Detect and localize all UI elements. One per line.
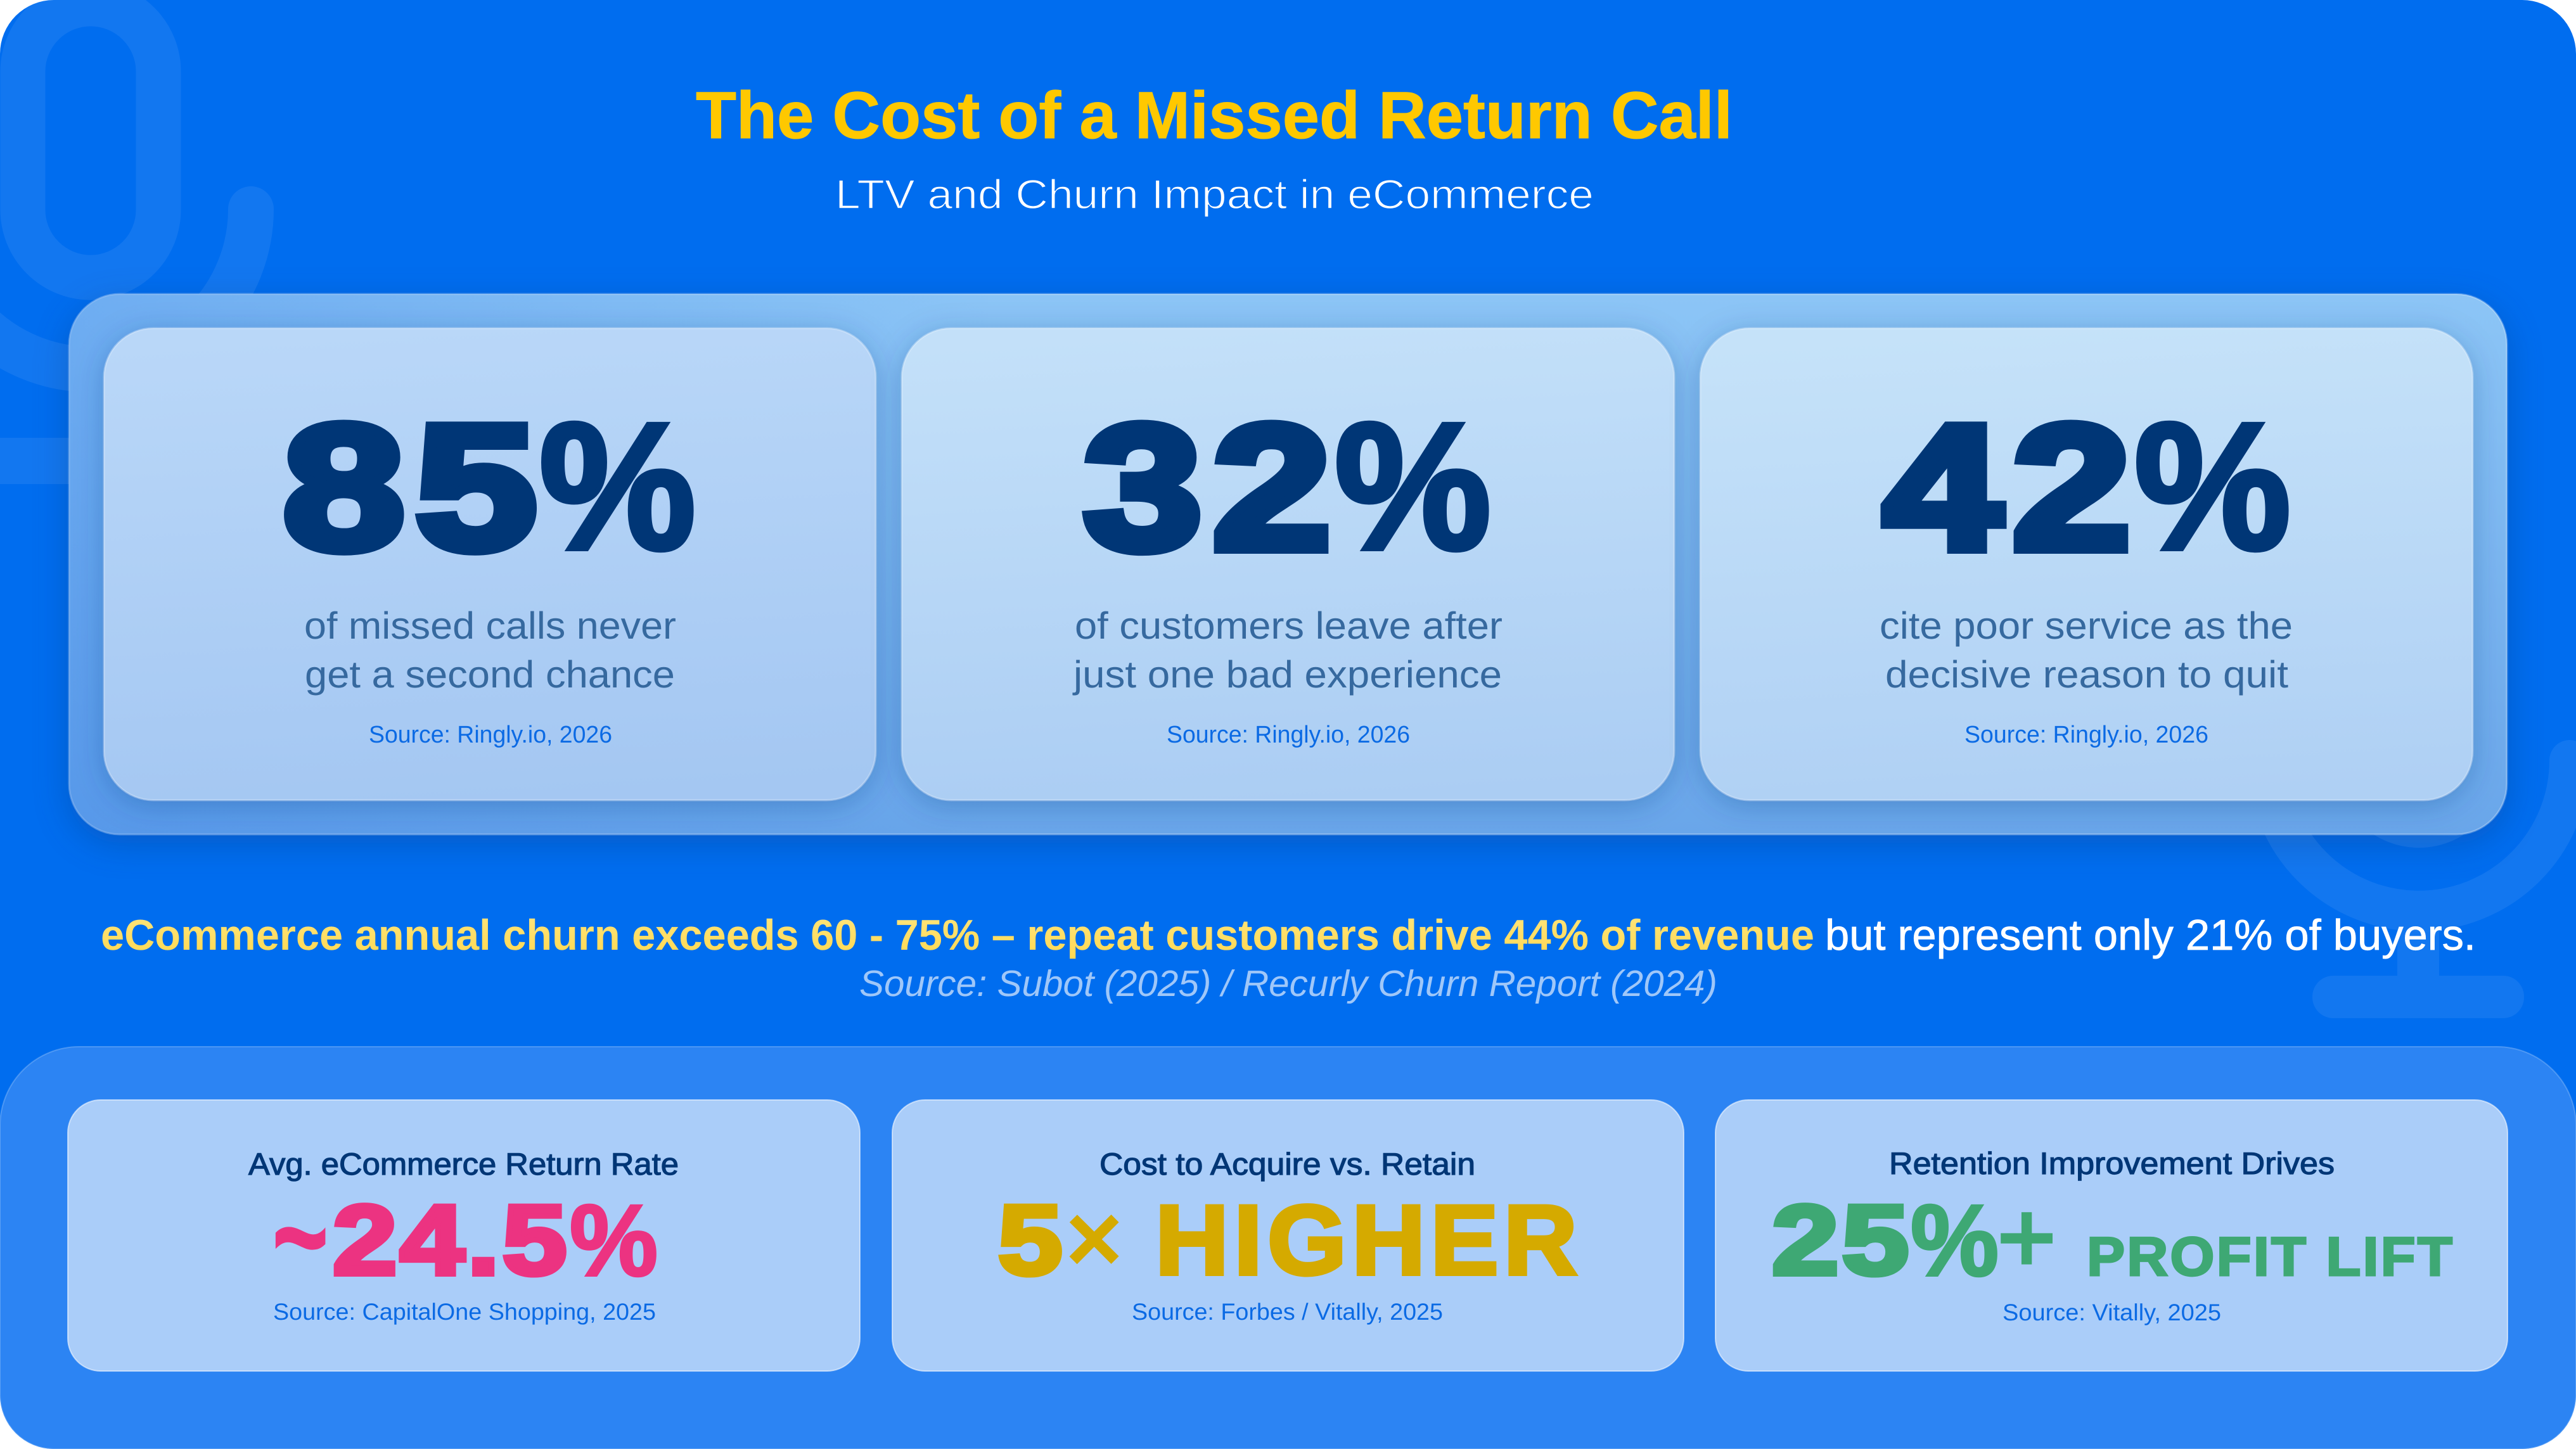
card: 42% stat: decisive reason to quit bbox=[1885, 653, 2288, 696]
card: profit lift: Source: Vitally, 2025 bbox=[2002, 1299, 2221, 1325]
card: 85% stat: % bbox=[539, 386, 696, 587]
card: 85% stat bbox=[104, 328, 876, 800]
card: profit lift: % bbox=[1911, 1184, 1999, 1297]
callout: churn statement: but represent only 21% of buyers. bbox=[1825, 911, 2476, 959]
card: return rate: Source: CapitalOne Shopping, 2025 bbox=[273, 1299, 656, 1325]
card: 32% stat: 32 bbox=[1084, 389, 1342, 587]
card: profit lift: Retention Improvement Drives bbox=[1889, 1147, 2335, 1181]
card: return rate bbox=[68, 1100, 860, 1371]
card: return rate: Avg. eCommerce Return Rate bbox=[248, 1147, 679, 1182]
card: return rate: % bbox=[570, 1184, 658, 1297]
icon: microphone watermark top left bbox=[0, 4, 251, 484]
card: profit lift bbox=[1715, 1100, 2508, 1371]
card: acquire vs retain: × bbox=[1065, 1184, 1123, 1294]
card: acquire vs retain bbox=[892, 1100, 1684, 1371]
card: 32% stat bbox=[902, 328, 1674, 800]
subtitle: LTV and Churn Impact in eCommerce bbox=[835, 171, 1594, 217]
icon: microphone watermark bottom right bbox=[2265, 740, 2576, 1018]
card: 32% stat: of customers leave after bbox=[1075, 604, 1503, 647]
card: profit lift: PROFIT LIFT bbox=[2087, 1227, 2454, 1287]
card: profit lift: 25 bbox=[1772, 1185, 1912, 1296]
card: profit lift: + bbox=[1997, 1182, 2056, 1293]
card: 32% stat: Source: Ringly.io, 2026 bbox=[1167, 722, 1410, 748]
callout: churn statement: eCommerce annual churn exceeds 60 - 75% – repeat customers drive 44% of revenue bbox=[101, 911, 1814, 959]
card: 32% stat: just one bad experience bbox=[1072, 653, 1502, 696]
card: return rate: 24.5 bbox=[333, 1185, 570, 1296]
card: 85% stat: get a second chance bbox=[305, 653, 675, 696]
card: 85% stat: Source: Ringly.io, 2026 bbox=[369, 722, 612, 748]
card: 42% stat: 42 bbox=[1883, 389, 2141, 587]
card: acquire vs retain: HIGHER bbox=[1155, 1185, 1582, 1296]
card: acquire vs retain: 5 bbox=[998, 1185, 1065, 1296]
panel: headline statistics bbox=[69, 294, 2507, 834]
card: 42% stat: cite poor service as the bbox=[1880, 604, 2293, 647]
card: 42% stat bbox=[1700, 328, 2473, 800]
card: acquire vs retain: Source: Forbes / Vitally, 2025 bbox=[1132, 1299, 1443, 1325]
top panel shadow bbox=[69, 304, 2507, 843]
card: return rate: ~ bbox=[272, 1162, 328, 1311]
card: 85% stat: of missed calls never bbox=[304, 604, 676, 647]
card: 85% stat: 85 bbox=[283, 389, 548, 587]
card: acquire vs retain: Cost to Acquire vs. Retain bbox=[1099, 1147, 1475, 1182]
card: 32% stat: % bbox=[1335, 386, 1491, 587]
card: 42% stat: % bbox=[2134, 386, 2291, 587]
title: The Cost of a Missed Return Call bbox=[696, 79, 1733, 153]
panel: supporting metrics bbox=[0, 1047, 2576, 1449]
card: 42% stat: Source: Ringly.io, 2026 bbox=[1964, 722, 2208, 748]
callout source: Source: Subot (2025) / Recurly Churn Report (2024) bbox=[859, 963, 1717, 1004]
